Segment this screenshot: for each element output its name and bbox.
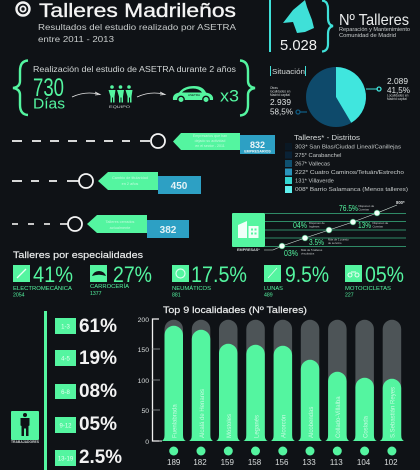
description: Reparación y Mantenimiento bbox=[339, 27, 410, 33]
bar: Alcobendas bbox=[298, 320, 322, 441]
panel: workers bbox=[11, 311, 122, 470]
specialty: electromecanica: ELECTROMECÁNICA bbox=[13, 285, 73, 292]
bar: Fuenlabrada bbox=[162, 320, 186, 441]
specialty: motocicletas bbox=[345, 262, 404, 298]
row: 382: Talleres cerrados bbox=[106, 220, 135, 224]
x3: x3 bbox=[220, 86, 239, 106]
row: 4-5: 4-5 bbox=[61, 356, 70, 362]
panel: top 9 localities bbox=[138, 305, 404, 467]
bar values: 113 bbox=[330, 458, 343, 467]
bar: Coslada: Coslada bbox=[363, 415, 369, 438]
small notes: Disponen de bbox=[358, 204, 375, 208]
panel: companies chart bbox=[232, 200, 406, 258]
row: 832: en el sector - 2011 bbox=[195, 144, 225, 148]
specialty: carroceria: CARROCERÍA bbox=[90, 283, 130, 290]
axis bbox=[138, 317, 162, 446]
data points bbox=[279, 210, 380, 249]
panel: timeline dashes bbox=[12, 133, 275, 238]
row: 9-12: 05% bbox=[79, 414, 117, 435]
bar: Alcala de Henares: Alcalá de Henares bbox=[200, 389, 206, 438]
icon: gear bbox=[16, 2, 30, 16]
bar values: 156 bbox=[275, 458, 289, 467]
icon: building bbox=[232, 213, 265, 247]
row: 832: dejado su actividad bbox=[195, 139, 225, 143]
small notes: Más de 1 puesto bbox=[328, 238, 349, 242]
row: 9-12 bbox=[55, 414, 117, 435]
small notes: de servicio bbox=[328, 241, 342, 245]
brace bbox=[322, 0, 333, 52]
callout: capital: 41,5% bbox=[387, 86, 410, 95]
bar: Alcobendas: Alcobendas bbox=[309, 407, 315, 438]
specialty: neumaticos: 17.5% bbox=[191, 262, 247, 287]
specialty: electromecanica: 41% bbox=[33, 262, 73, 287]
right brace bbox=[240, 60, 255, 116]
small notes: vinculados bbox=[301, 252, 315, 256]
horizontal lines bbox=[265, 214, 406, 246]
row: 6-8: 08% bbox=[79, 381, 117, 402]
percent labels: 03% bbox=[284, 249, 298, 258]
callout: capital bbox=[366, 77, 410, 101]
panel: districts legend bbox=[285, 133, 408, 193]
percent labels: 76.5% bbox=[339, 204, 358, 213]
percent labels: 13% bbox=[358, 221, 371, 230]
legend labels: 008* Barrio Salamanca (Menos talleres) bbox=[295, 187, 408, 193]
left brace bbox=[13, 60, 28, 115]
specialty: electromecanica bbox=[13, 262, 73, 298]
specialty: lunas: LUNAS bbox=[264, 286, 284, 292]
bar values: 104 bbox=[357, 458, 371, 467]
percent labels: 04% bbox=[293, 221, 307, 230]
specialty: motocicletas: 227 bbox=[345, 292, 354, 298]
small notes: Disponen de bbox=[372, 221, 389, 225]
vertical bar bbox=[44, 311, 47, 470]
bar: Alcorcon bbox=[271, 320, 295, 441]
bar values: 159 bbox=[221, 458, 235, 467]
legend swatches bbox=[285, 143, 292, 193]
callout: other localities bbox=[270, 86, 307, 116]
icon: team bbox=[108, 85, 132, 102]
axis: 50 bbox=[141, 408, 149, 415]
row: 1-3: 1-3 bbox=[61, 324, 70, 330]
bar: Fuenlabrada: Fuenlabrada bbox=[172, 404, 178, 438]
panel: situation bbox=[270, 66, 410, 127]
percent labels bbox=[284, 204, 371, 258]
trend line bbox=[264, 205, 397, 250]
teal divider bbox=[269, 0, 271, 52]
study sentence: Realización del estudio de ASETRA durante 2 años bbox=[33, 65, 236, 74]
percent labels: 3.5% bbox=[309, 238, 324, 247]
bar values: 189 bbox=[167, 458, 181, 467]
legend labels: 275* Carabanchel bbox=[295, 153, 341, 159]
small notes: Cuentas bbox=[372, 224, 384, 228]
row: 832: Empresarios que han bbox=[193, 134, 227, 138]
bar: S.Sebastian Reyes: S.Sebastián Reyes bbox=[391, 387, 397, 438]
small notes bbox=[301, 204, 389, 256]
callout: capital: 2.089 bbox=[387, 77, 409, 86]
row: 832: 832 bbox=[250, 140, 265, 150]
row: 13-19: 2.5% bbox=[79, 447, 122, 468]
heading: Talleres por especialidades bbox=[13, 250, 144, 260]
team label: EQUIPO bbox=[109, 105, 130, 109]
arrow bbox=[72, 92, 100, 97]
axis: 200 bbox=[138, 317, 149, 324]
callout: capital: Localidades en bbox=[387, 94, 409, 98]
bar values bbox=[167, 458, 398, 467]
bar: Alcala de Henares bbox=[189, 320, 213, 441]
specialty: neumaticos: NEUMÁTICOS bbox=[172, 285, 212, 292]
heading: Situación bbox=[272, 67, 305, 76]
specialty: lunas: 489 bbox=[264, 292, 273, 298]
axis: 150 bbox=[138, 347, 149, 354]
row: 382 bbox=[12, 215, 189, 238]
row: 832: EMPRESARIOS bbox=[244, 150, 271, 154]
small notes: Más de 5 talleres bbox=[301, 248, 323, 252]
subtitle: Resultados del estudio realizado por ASETRA bbox=[38, 22, 236, 32]
icon: worker bbox=[11, 411, 39, 440]
row: 450: Cambio de titularidad bbox=[112, 176, 148, 180]
small notes: Cuentas bbox=[358, 208, 370, 212]
specialty: lunas bbox=[264, 262, 329, 298]
730 days bbox=[33, 74, 65, 112]
legend labels: 222* Cuatro Caminos/Tetuán/Estrecho bbox=[295, 170, 404, 176]
row: 450: 450 bbox=[171, 181, 188, 192]
description bbox=[339, 27, 410, 39]
icon: car bbox=[173, 86, 213, 103]
legend labels: 131* Villaverde bbox=[295, 178, 334, 184]
bar: Collado-Villalba bbox=[325, 320, 350, 441]
row: 450: en 2 años bbox=[122, 182, 138, 186]
bar dots bbox=[169, 446, 396, 456]
axis: 100 bbox=[138, 378, 149, 385]
legend labels: 303* San Blas/Ciudad Lineal/Canillejas bbox=[295, 144, 401, 150]
specialty: neumaticos: 881 bbox=[172, 292, 181, 298]
specialty: neumaticos bbox=[172, 262, 247, 298]
row: 9-12: 9-12 bbox=[59, 424, 72, 430]
heading: Talleres* - Distritos bbox=[294, 133, 360, 142]
row: 832 bbox=[12, 133, 275, 154]
header bbox=[16, 0, 236, 44]
row: 1-3: 61% bbox=[79, 316, 117, 337]
pie chart bbox=[306, 67, 366, 127]
bar: Alcorcon: Alcorcón bbox=[282, 415, 288, 438]
specialty: lunas: 9.5% bbox=[285, 262, 329, 287]
specialty: electromecanica: 2054 bbox=[13, 292, 25, 298]
specialty: motocicletas: MOTOCICLETAS bbox=[345, 286, 392, 292]
callout: other localities: 2.939 bbox=[270, 98, 292, 107]
bar: Coslada bbox=[352, 320, 377, 441]
row: 13-19: 13-19 bbox=[58, 456, 74, 462]
specialty: carroceria: 1377 bbox=[90, 291, 102, 297]
bar values: 182 bbox=[193, 458, 207, 467]
chart title: Top 9 localidades (Nº Talleres) bbox=[163, 305, 307, 315]
label: empresas: EMPRESAS* bbox=[237, 248, 260, 252]
730 days: 730 bbox=[33, 74, 64, 102]
subtitle bbox=[38, 22, 236, 44]
panel: specialties bbox=[13, 250, 404, 298]
callout: other localities: localidades en bbox=[270, 90, 291, 94]
heading: Nº Talleres bbox=[339, 12, 409, 29]
row: 6-8: 6-8 bbox=[61, 390, 70, 396]
730 days: Días bbox=[33, 96, 65, 112]
callout: capital: Madrid capital bbox=[387, 97, 407, 101]
row: 382: 382 bbox=[160, 225, 177, 236]
icon: car: ASETRA bbox=[188, 93, 200, 97]
description: Comunidad de Madrid bbox=[339, 33, 396, 39]
specialty: carroceria: 27% bbox=[113, 262, 152, 287]
bar: S.Sebastian Reyes bbox=[380, 320, 404, 441]
callout: other localities: 58,5% bbox=[270, 108, 293, 116]
row: 6-8 bbox=[55, 381, 117, 402]
small notes: Ingleses bbox=[309, 224, 320, 228]
bar values: 158 bbox=[248, 458, 262, 467]
small notes: Disponen de bbox=[309, 221, 325, 225]
bar: Mostoles: Móstoles bbox=[227, 414, 233, 438]
row: 450 bbox=[12, 172, 201, 194]
panel: study duration bbox=[13, 60, 255, 116]
panel: number of workshops bbox=[269, 0, 410, 54]
row: 13-19 bbox=[55, 447, 122, 468]
row: 1-3 bbox=[55, 316, 117, 337]
callout: other localities: Madrid capital bbox=[270, 93, 290, 97]
bar: Leganes: Leganés bbox=[254, 415, 260, 438]
legend labels bbox=[295, 144, 408, 193]
icon: Madrid map bbox=[283, 0, 314, 33]
callout: other localities: Otras bbox=[270, 86, 278, 90]
total number: 5.028 bbox=[280, 37, 317, 54]
bar: Collado-Villalba: Collado-Villalba bbox=[336, 396, 342, 438]
bar: Mostoles bbox=[216, 320, 240, 441]
axis: 0 bbox=[145, 439, 149, 446]
specialty: carroceria bbox=[90, 262, 152, 297]
bar: Leganes bbox=[243, 320, 268, 441]
label: 800: 800* bbox=[396, 200, 405, 205]
row: 4-5 bbox=[55, 348, 117, 369]
label: trabajadores: TRABAJADORES bbox=[11, 440, 40, 444]
bar values: 102 bbox=[384, 458, 398, 467]
title: Talleres Madrileños bbox=[39, 0, 236, 22]
row: 382: actualmente bbox=[110, 226, 130, 230]
row: 4-5: 19% bbox=[79, 348, 117, 369]
arrow bbox=[137, 92, 165, 97]
legend labels: 267* Vallecas bbox=[295, 162, 330, 168]
subtitle: entre 2011 - 2013 bbox=[38, 34, 114, 44]
bar values: 133 bbox=[302, 458, 316, 467]
specialty: motocicletas: 05% bbox=[365, 262, 404, 287]
